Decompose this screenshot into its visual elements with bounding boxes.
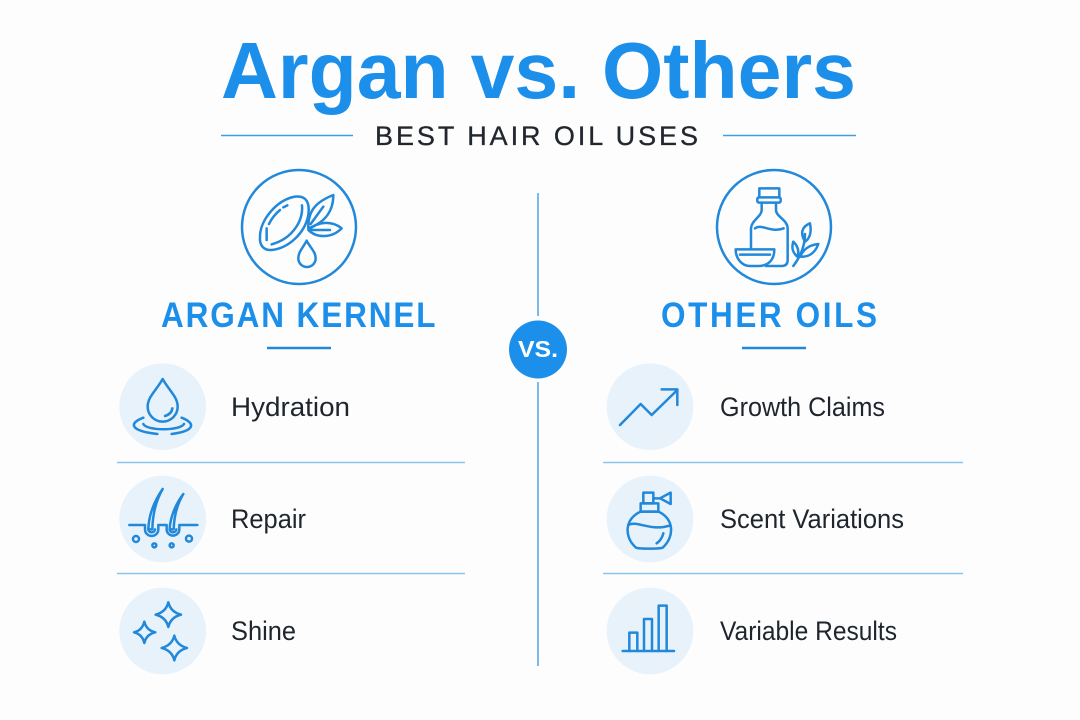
subtitle: BEST HAIR OIL USES <box>375 121 698 151</box>
icon: rising arrow <box>607 363 693 450</box>
row: variable results <box>607 588 897 674</box>
icon: water drop <box>119 363 206 450</box>
row: scent variations <box>607 476 904 562</box>
row: scent variations: Scent Variations <box>720 504 904 534</box>
icon: sparkles <box>119 588 206 674</box>
row: growth claims <box>607 363 885 450</box>
heading: argan kernel: ARGAN KERNEL <box>161 297 436 335</box>
icon: bottle with bowl and sprig <box>717 170 831 284</box>
row: shine: Shine <box>231 616 296 646</box>
panel: argan kernel <box>117 170 465 674</box>
center divider with VS badge: VS. <box>518 336 558 362</box>
row: variable results: Variable Results <box>720 616 897 646</box>
row: hydration: Hydration <box>231 392 350 422</box>
row dividers <box>117 462 465 574</box>
title: Argan vs. Others <box>221 26 856 115</box>
row dividers <box>603 462 963 574</box>
row: shine <box>119 588 296 674</box>
row: repair <box>119 476 306 562</box>
row: hydration <box>119 363 350 450</box>
icon: perfume bottle <box>607 476 693 562</box>
heading underline <box>267 347 331 349</box>
row: repair: Repair <box>231 504 306 534</box>
icon: bar chart <box>607 588 693 674</box>
center divider with VS badge <box>509 193 567 666</box>
row: growth claims: Growth Claims <box>720 392 885 422</box>
icon: hair follicles <box>119 476 206 562</box>
icon: argan kernel with leaves and drop <box>242 170 356 284</box>
heading: other oils: OTHER OILS <box>661 297 877 335</box>
panel: other oils <box>603 170 963 674</box>
heading underline <box>742 347 806 349</box>
